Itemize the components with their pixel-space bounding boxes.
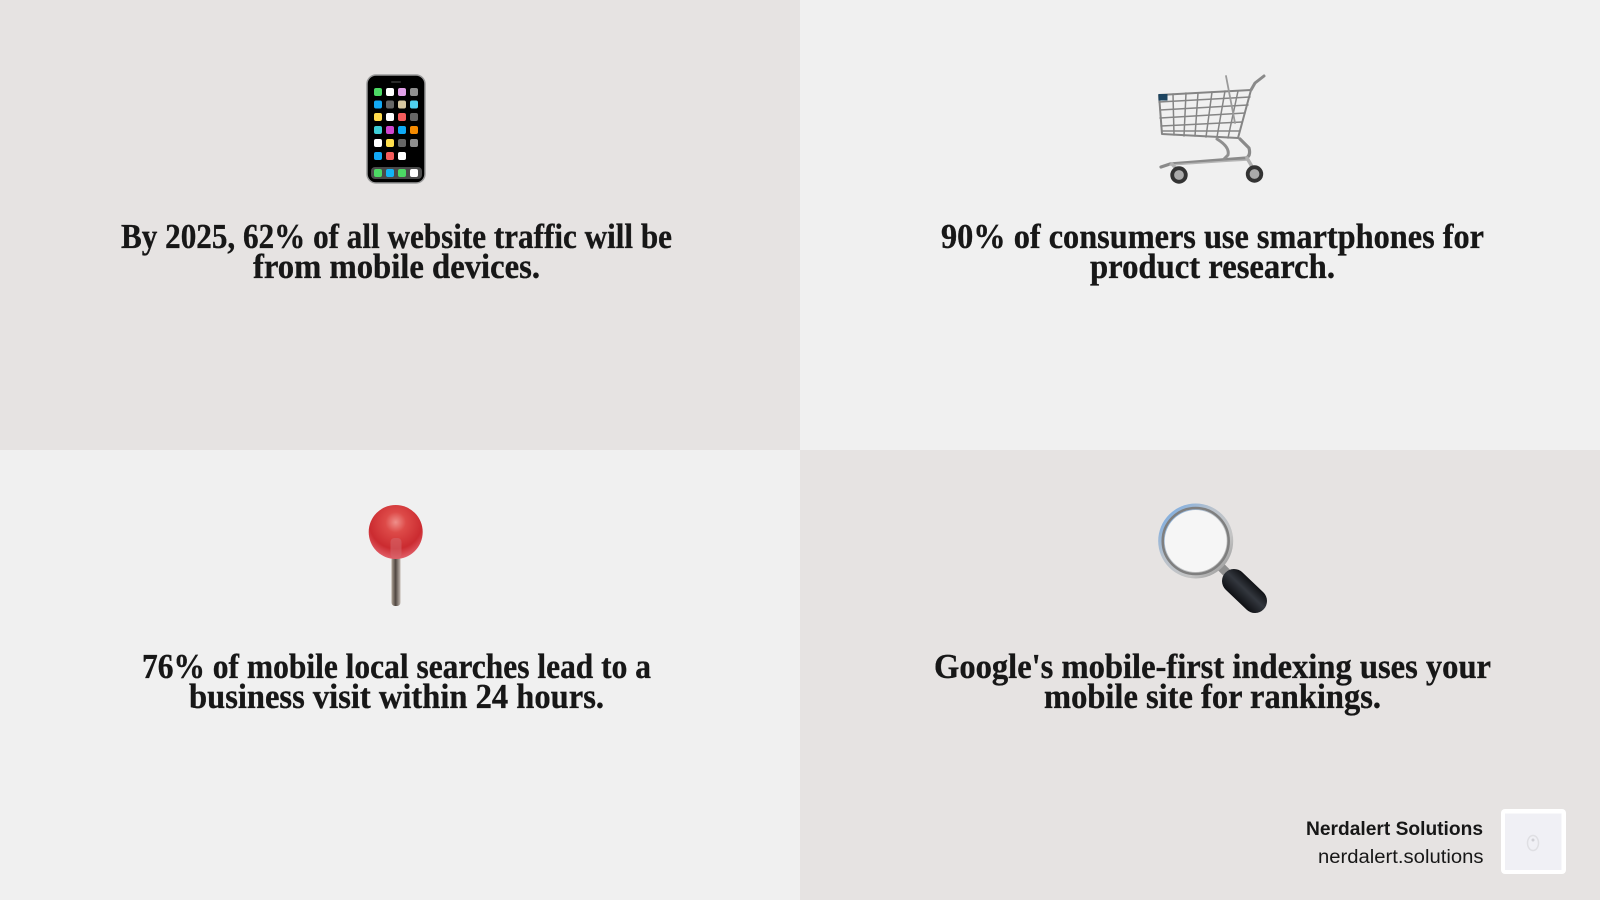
heading: website traffic: from mobile devices. <box>253 247 540 286</box>
heading: mobile-first indexing: mobile site for rankings. <box>1044 677 1381 716</box>
heading: mobile-first indexing: Google's mobile-first indexing uses your <box>934 647 1491 686</box>
heading: product research: 90% of consumers use smartphones for <box>941 217 1484 256</box>
heading: local searches: 76% of mobile local searches lead to a <box>142 647 651 686</box>
heading: local searches: business visit within 24 hours. <box>189 677 604 716</box>
heading: local searches <box>142 647 651 716</box>
panel: product research <box>800 0 1600 450</box>
panel: mobile-first indexing <box>800 450 1600 900</box>
icon: shopping cart <box>1158 76 1264 182</box>
icon: round pushpin <box>369 505 423 606</box>
heading: product research: product research. <box>1090 247 1335 286</box>
panel: local searches <box>0 450 800 900</box>
panel background <box>800 0 1600 450</box>
brand url: nerdalert.solutions <box>1318 847 1484 868</box>
panel background <box>0 0 800 450</box>
heading: website traffic: By 2025, 62% of all website traffic will be <box>121 217 672 256</box>
heading: product research <box>941 217 1484 286</box>
panel: website traffic <box>0 0 800 450</box>
heading: website traffic <box>121 217 672 286</box>
icon: magnifying glass <box>1158 504 1255 601</box>
brand name: Nerdalert Solutions <box>1306 819 1483 840</box>
logo box <box>1501 809 1566 874</box>
icon: mobile phone <box>367 75 425 183</box>
branding footer <box>1306 809 1566 874</box>
heading: mobile-first indexing <box>934 647 1491 716</box>
panel background <box>800 450 1600 900</box>
panel background <box>0 450 800 900</box>
